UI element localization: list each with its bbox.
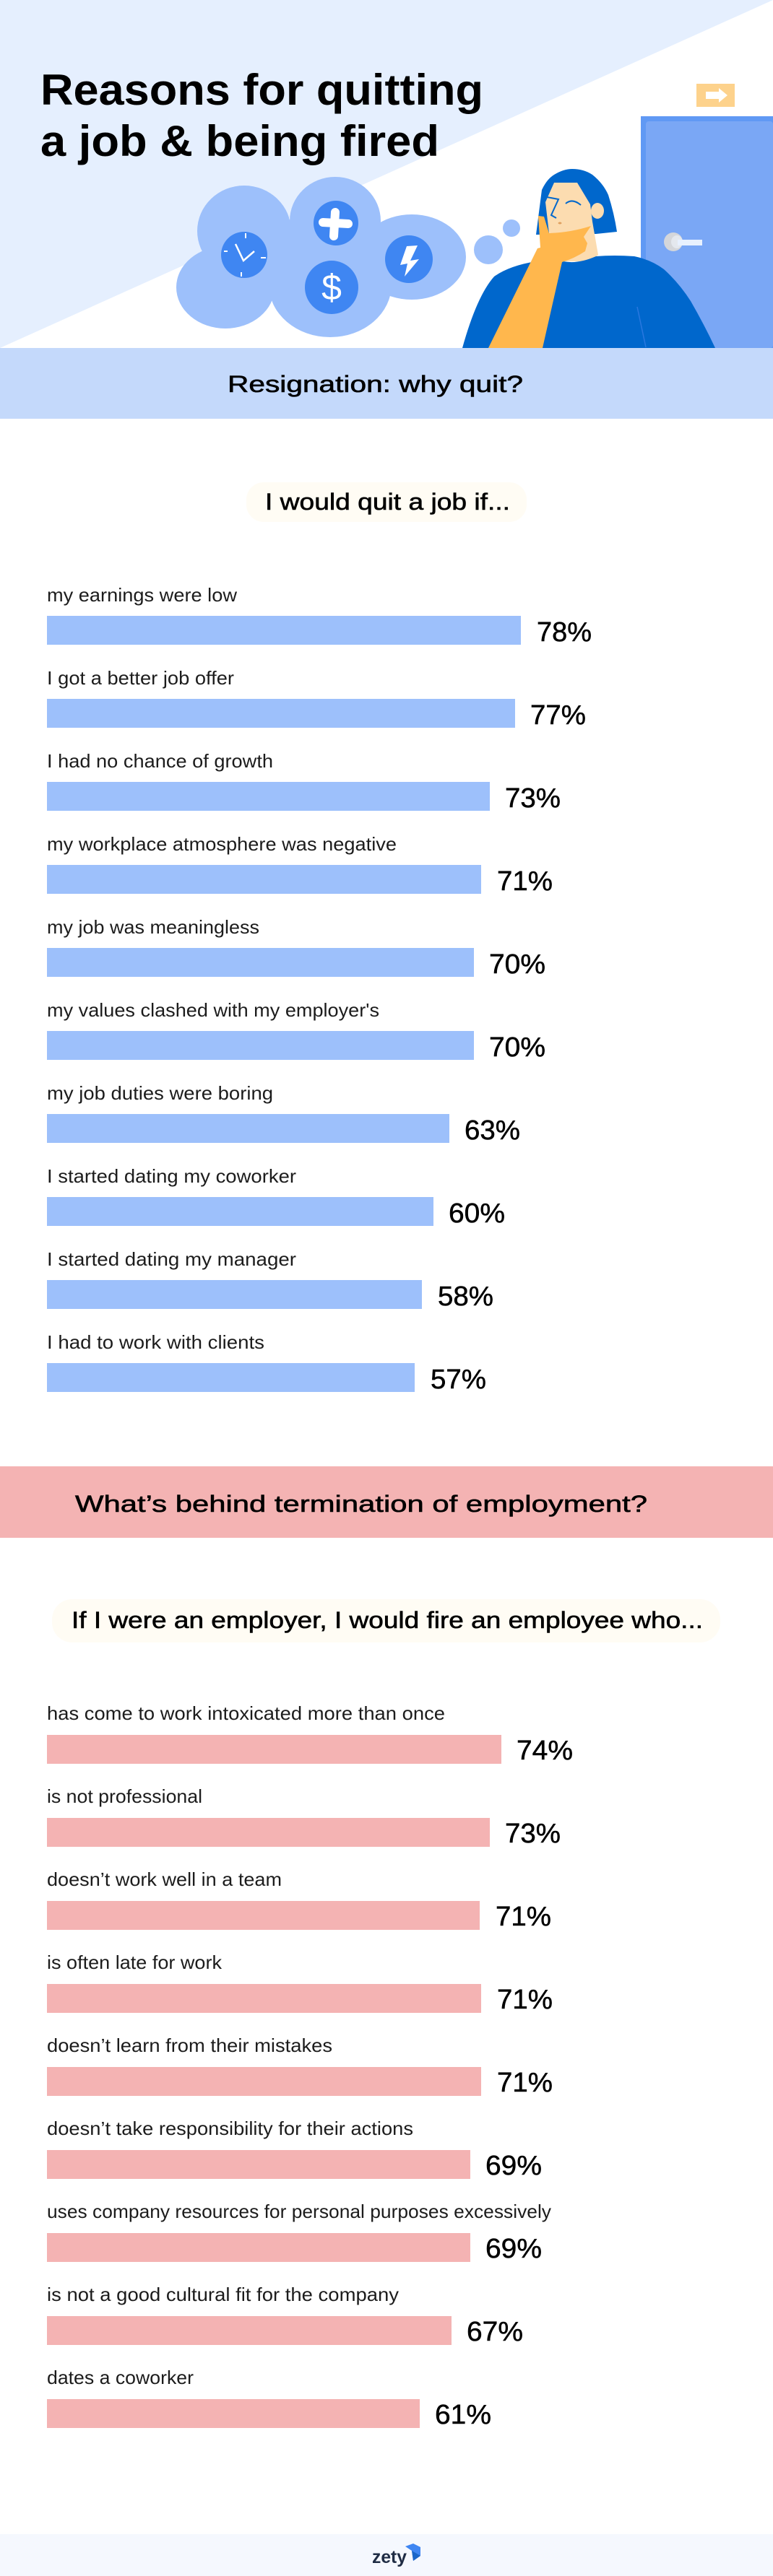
row: growth: I had no chance of growth xyxy=(47,750,273,772)
row: dates coworker: dates a coworker xyxy=(47,2367,194,2388)
row: better offer: 77% xyxy=(530,700,586,731)
row: mistakes: doesn’t learn from their mistakes xyxy=(47,2035,332,2056)
row: dates coworker: 61% xyxy=(435,2400,491,2430)
row: resources: uses company resources for personal purposes excessively xyxy=(47,2201,551,2222)
footer band with logo xyxy=(0,2534,773,2576)
title xyxy=(40,66,483,165)
row: dating coworker: 60% xyxy=(449,1198,505,1229)
row: boring xyxy=(47,1082,520,1146)
row: cultural fit xyxy=(47,2284,523,2347)
row: meaningless: my job was meaningless xyxy=(47,916,259,938)
row: meaningless xyxy=(47,916,545,980)
row: clients: I had to work with clients xyxy=(47,1331,264,1353)
row: clients: 57% xyxy=(431,1365,486,1395)
header background triangle xyxy=(0,0,773,348)
row: intoxicated: 74% xyxy=(517,1736,573,1766)
subheading pill: fire: If I were an employer, I would fire an employee who... xyxy=(72,1607,703,1633)
bar chart: reasons for quitting xyxy=(47,584,592,1395)
row: growth xyxy=(47,750,561,814)
row: better offer xyxy=(47,667,586,731)
row: team: doesn’t work well in a team xyxy=(47,1868,282,1890)
bar chart: reasons for firing xyxy=(47,1702,573,2430)
row: team: 71% xyxy=(496,1902,551,1932)
row: late xyxy=(47,1951,553,2015)
icon: lightning bolt xyxy=(385,235,433,283)
row: late: is often late for work xyxy=(47,1951,223,1973)
section band: resignation: Resignation: why quit? xyxy=(228,371,523,397)
row: atmosphere xyxy=(47,833,553,897)
row: mistakes: 71% xyxy=(497,2068,553,2098)
row: growth: 73% xyxy=(505,783,561,814)
row: earnings: my earnings were low xyxy=(47,584,237,606)
row: not professional xyxy=(47,1785,561,1849)
row: atmosphere: 71% xyxy=(497,866,553,897)
row: intoxicated: has come to work intoxicated more than once xyxy=(47,1702,445,1724)
row: boring: 63% xyxy=(465,1115,520,1146)
row: meaningless: 70% xyxy=(489,949,545,980)
row: resources xyxy=(47,2201,551,2264)
icon: dollar xyxy=(305,261,358,314)
row: resources: 69% xyxy=(485,2234,542,2264)
row: not professional: 73% xyxy=(505,1819,561,1849)
section band: termination xyxy=(0,1466,773,1538)
row: responsibility: doesn’t take responsibility for their actions xyxy=(47,2118,413,2139)
row: earnings: 78% xyxy=(537,617,592,648)
row: values: 70% xyxy=(489,1032,545,1063)
subheading pill: fire xyxy=(52,1599,720,1642)
row: boring: my job duties were boring xyxy=(47,1082,273,1104)
logo: zety: zety xyxy=(372,2547,407,2567)
row: dating manager: 58% xyxy=(438,1282,493,1312)
row: dating coworker xyxy=(47,1165,505,1229)
logo: zety xyxy=(372,2544,420,2567)
row: not professional: is not professional xyxy=(47,1785,202,1807)
title: a job & being fired xyxy=(40,117,439,165)
icon: exit sign xyxy=(696,84,735,107)
icon: dollar: $ xyxy=(321,267,342,308)
door xyxy=(641,116,773,348)
row: values xyxy=(47,999,545,1063)
icon: clock xyxy=(221,232,267,278)
row: dating manager xyxy=(47,1248,493,1312)
row: intoxicated xyxy=(47,1702,573,1766)
row: dating coworker: I started dating my coworker xyxy=(47,1165,296,1187)
icon: plus xyxy=(314,201,358,245)
section band: resignation xyxy=(0,348,773,419)
row: cultural fit: 67% xyxy=(467,2317,523,2347)
row: team xyxy=(47,1868,551,1932)
row: better offer: I got a better job offer xyxy=(47,667,234,689)
row: responsibility xyxy=(47,2118,542,2181)
row: atmosphere: my workplace atmosphere was negative xyxy=(47,833,397,855)
row: clients xyxy=(47,1331,486,1395)
subheading pill: quit: I would quit a job if... xyxy=(265,489,510,515)
title: Reasons for quitting xyxy=(40,66,483,114)
row: earnings xyxy=(47,584,592,648)
row: values: my values clashed with my employer's xyxy=(47,999,379,1021)
thought cloud xyxy=(176,177,520,337)
subheading pill: quit xyxy=(246,482,527,522)
row: mistakes xyxy=(47,2035,553,2098)
section band: termination: What’s behind termination of employment? xyxy=(75,1491,647,1517)
row: cultural fit: is not a good cultural fit for the company xyxy=(47,2284,399,2305)
row: dating manager: I started dating my manager xyxy=(47,1248,296,1270)
row: late: 71% xyxy=(497,1985,553,2015)
row: responsibility: 69% xyxy=(485,2151,542,2181)
row: dates coworker xyxy=(47,2367,491,2430)
person xyxy=(462,169,715,348)
